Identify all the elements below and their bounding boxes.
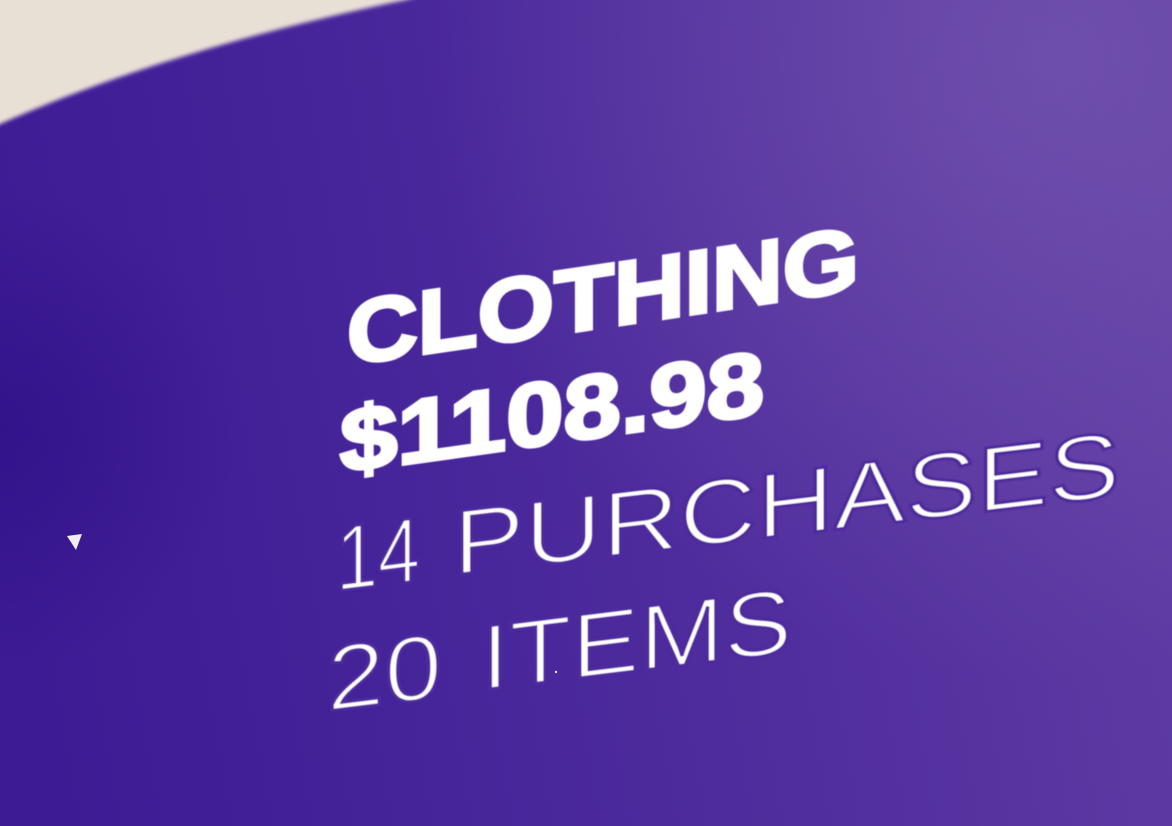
cream paper corner bbox=[0, 0, 500, 138]
heading: CLOTHING: CLOTHING bbox=[347, 209, 859, 385]
line: 14 PURCHASES bbox=[336, 412, 1120, 611]
line: 20 ITEMS: 20 bbox=[327, 613, 442, 731]
line: 14 PURCHASES: PURCHASES bbox=[453, 412, 1120, 595]
text block: clothing details bbox=[327, 209, 1120, 731]
line: 20 ITEMS: ITEMS bbox=[481, 568, 792, 710]
line: 14 PURCHASES: 14 bbox=[336, 497, 420, 611]
amount: $1108.98: $1108.98 bbox=[340, 333, 764, 493]
speck: tiny dot bbox=[555, 671, 557, 673]
speck: white fleck bbox=[67, 534, 82, 550]
line: 20 ITEMS bbox=[327, 568, 792, 731]
